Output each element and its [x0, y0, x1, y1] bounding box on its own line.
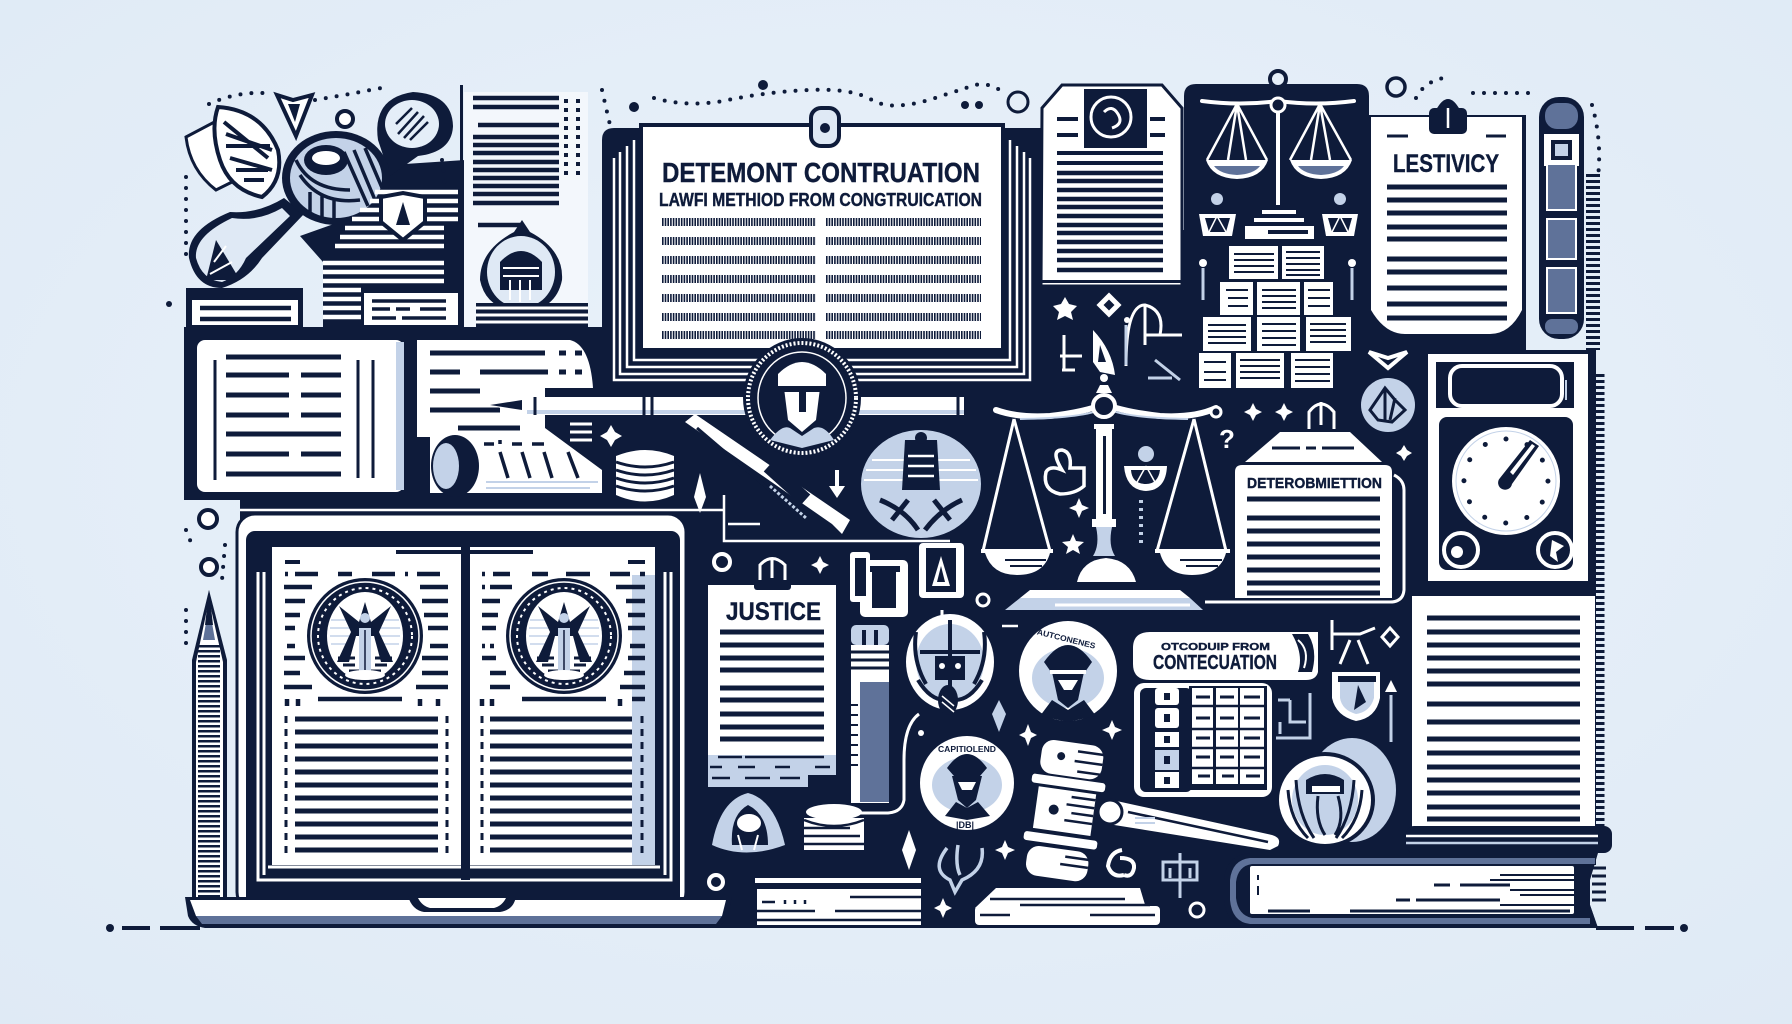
column — [1092, 374, 1116, 556]
base — [185, 896, 732, 928]
icon: balloon lens — [377, 92, 453, 176]
large balance scale — [981, 374, 1230, 610]
left page — [272, 547, 461, 865]
handle — [1450, 366, 1562, 406]
tag: CONTECUATION — [1133, 632, 1318, 680]
document stack bottom — [755, 878, 921, 925]
icon: U glyph — [939, 845, 982, 892]
lamp — [1390, 695, 1392, 742]
icon: spark small — [600, 425, 622, 447]
head — [1018, 738, 1111, 884]
small label: OTCODUIP FROM — [1161, 641, 1270, 653]
small balance scale — [1202, 71, 1354, 239]
laptop — [185, 514, 732, 928]
seal number: |DB| — [956, 820, 974, 830]
icon: gavel — [1018, 738, 1279, 884]
icon: diagonal pen — [685, 414, 850, 534]
icon: sparks around emblems — [902, 594, 1122, 918]
lid frame — [237, 514, 686, 910]
icon: coin stack — [616, 450, 674, 502]
seal right — [506, 578, 622, 694]
emblem: officer portrait lower — [920, 736, 1014, 830]
coin emblem — [1275, 738, 1396, 848]
page frame — [258, 572, 671, 880]
icon: knot glyph — [1045, 450, 1084, 494]
glyph cluster: star and symbols — [1053, 296, 1182, 380]
icon: ring bottom — [709, 875, 723, 889]
pans — [981, 549, 1230, 575]
header rule and marks — [285, 552, 645, 562]
text lines — [1387, 187, 1507, 318]
right document — [1412, 596, 1595, 830]
dense text columns — [662, 222, 981, 335]
closed book — [1224, 853, 1606, 928]
ring lettering: CAPITIOLEND — [938, 745, 996, 754]
tall document with seal — [460, 85, 588, 327]
icon: V shield — [277, 95, 312, 136]
small document middle — [364, 293, 458, 325]
icon: small ring — [337, 111, 353, 127]
clock panel — [1428, 354, 1588, 581]
clip — [1429, 99, 1467, 134]
label: CONTECUATION — [1153, 652, 1277, 674]
document: DETERMINATION — [1205, 402, 1404, 602]
tag — [1245, 432, 1382, 462]
icon: up arrow marker — [1369, 352, 1407, 368]
document panel: scroll — [417, 340, 602, 497]
icon: cylinder — [850, 625, 924, 813]
icon: leaf front — [214, 107, 279, 197]
clock face — [1452, 427, 1560, 535]
document: LESTIVICY — [1371, 99, 1522, 334]
shield — [1332, 672, 1380, 721]
small document left — [186, 288, 303, 327]
lamp posts — [1203, 268, 1352, 300]
icon: magnifier lens — [282, 131, 390, 225]
portrait tile — [1084, 89, 1147, 148]
open book with main document — [614, 108, 1030, 380]
icon: arrow marker — [694, 473, 706, 513]
icon: ring and glyphs near book — [1108, 850, 1204, 917]
text lines — [1057, 119, 1165, 163]
icon: crest disc — [1361, 378, 1415, 432]
bottom stripes — [476, 303, 588, 327]
calendar table — [1134, 683, 1272, 797]
cluster: leaves and magnifier illustration — [186, 92, 458, 317]
text lines — [473, 98, 559, 225]
icon: small towers — [850, 543, 964, 617]
subheading: LAWFI METHIOD FROM CONGTRUICATION — [659, 190, 982, 210]
icon: sparks near column — [1062, 498, 1141, 554]
white page — [641, 125, 1003, 350]
lower text lines right — [490, 719, 632, 850]
icon: ring and spark — [714, 554, 829, 574]
text lines — [720, 632, 824, 739]
scroll roll — [431, 435, 479, 497]
icon: arrow marker right — [829, 470, 845, 498]
heading: JUSTICE — [726, 598, 821, 626]
heading: LESTIVICY — [1393, 150, 1499, 178]
seal: officer portrait — [743, 338, 861, 458]
icon: right bust — [1322, 193, 1358, 236]
clip — [811, 108, 839, 146]
sheet — [1235, 465, 1392, 598]
corner swirls — [1444, 533, 1572, 567]
icon: left bust — [1199, 193, 1236, 236]
decorative dotted trails — [166, 77, 1599, 650]
shelf under right document — [1406, 826, 1612, 853]
heading: DETEMONT CONTRUATION — [662, 157, 980, 188]
emblem: scale crest — [906, 610, 994, 715]
text lines — [1247, 499, 1380, 593]
clip — [1309, 402, 1334, 429]
striped block — [323, 192, 458, 317]
torn footer — [708, 755, 836, 787]
icon: sound block — [975, 888, 1160, 925]
right page — [470, 547, 655, 865]
icon: small shield — [381, 193, 425, 240]
icon: handle bulb — [189, 198, 304, 288]
seal left — [307, 578, 423, 694]
lower text lines left — [295, 719, 438, 850]
baseline right — [1596, 924, 1688, 932]
clip — [754, 558, 791, 590]
page edges — [614, 140, 1030, 380]
emblem: officer portrait upper — [1019, 621, 1117, 722]
upper broken text — [284, 574, 448, 706]
bookmark pill — [1539, 97, 1584, 339]
seal emblem — [480, 220, 562, 312]
thin shelf lines above laptop — [240, 495, 950, 541]
icon: sparks — [1244, 403, 1412, 461]
text lines — [1427, 618, 1580, 819]
base — [1005, 558, 1203, 610]
icon: question mark: ? — [1219, 424, 1235, 454]
stripes behind pen — [570, 424, 592, 440]
ring lettering: AUTCONENES — [1036, 627, 1097, 651]
icon: leaf back — [186, 118, 236, 190]
icon: glyph beside calendar — [1276, 693, 1310, 738]
icon: coins — [804, 804, 864, 850]
icon: pencil — [192, 590, 227, 897]
tag document — [1040, 85, 1184, 286]
icon: fountain pen — [490, 395, 964, 417]
document: JUSTICE — [708, 558, 836, 787]
heading: DETEROBMIETTION — [1247, 475, 1382, 492]
baseline left — [106, 924, 200, 932]
stack of document cards — [1199, 246, 1356, 388]
spine — [461, 550, 470, 880]
handle — [1098, 800, 1279, 850]
beam — [996, 404, 1216, 416]
icon: hourglass glyph and shield — [1332, 620, 1398, 742]
document panel: left sheet — [197, 340, 404, 492]
side tick marks — [1593, 174, 1600, 832]
emblem: round crest — [861, 430, 981, 538]
rings near pencil — [199, 510, 217, 575]
emblem: bell — [712, 793, 785, 852]
icon: small bust — [1124, 446, 1167, 491]
clock screen — [1439, 417, 1573, 570]
stepped base — [1245, 210, 1314, 239]
page-edge stripes — [1592, 868, 1606, 900]
dark backdrop silhouette — [184, 84, 1598, 928]
margin dashes — [286, 716, 642, 856]
strings — [983, 419, 1226, 551]
